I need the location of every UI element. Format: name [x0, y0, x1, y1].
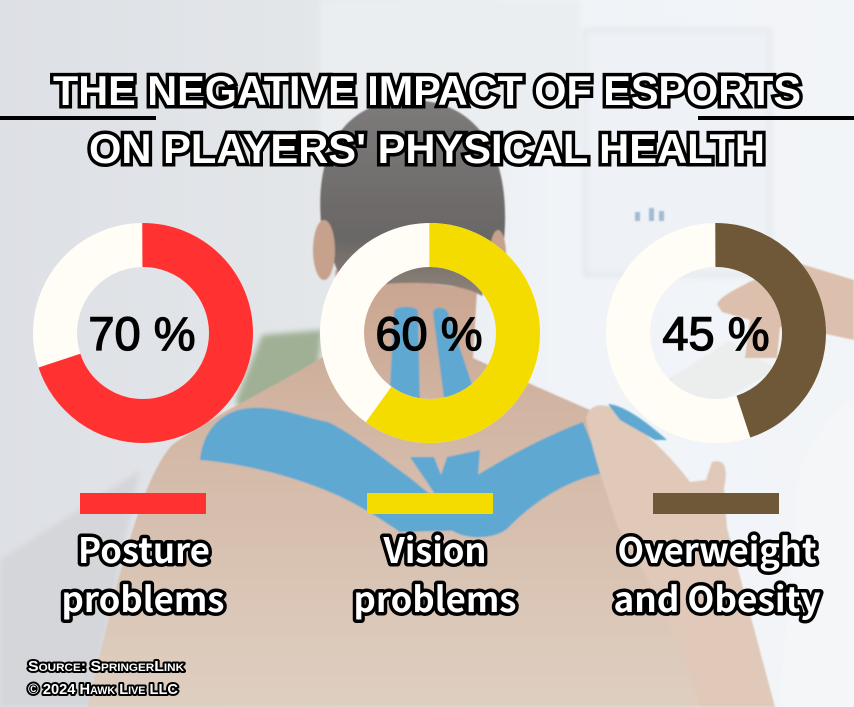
source and copyright	[28, 658, 184, 698]
label: overweight and obesity: Overweight	[618, 523, 817, 574]
source and copyright: © 2024 Hawk Live LLC	[28, 681, 178, 698]
therapist hand on shoulder	[586, 405, 775, 707]
label: posture problems: Posture	[78, 523, 210, 574]
source and copyright: Source: SpringerLink	[28, 658, 184, 675]
donut: posture 70%	[55, 245, 231, 421]
legend bar: overweight	[653, 493, 779, 514]
label: overweight and obesity: and Obesity	[614, 572, 820, 623]
donut: overweight 45%	[628, 245, 804, 421]
title: THE NEGATIVE IMPACT OF ESPORTS	[53, 67, 801, 114]
label: posture problems: problems	[62, 572, 224, 623]
back and shoulders	[87, 270, 772, 707]
donut: vision 60%	[342, 245, 518, 421]
donut: vision 60%: 60 %	[375, 307, 483, 360]
title	[53, 67, 801, 172]
title rules	[0, 116, 854, 120]
legend bar: posture	[80, 493, 206, 514]
tape	[200, 408, 478, 532]
therapist upper hand	[717, 263, 854, 358]
label: posture problems	[62, 523, 224, 623]
keyboard	[667, 341, 777, 410]
label: vision problems: Vision	[383, 523, 486, 574]
donut: posture 70%: 70 %	[88, 307, 196, 360]
label: vision problems	[354, 523, 516, 623]
label: overweight and obesity	[614, 523, 820, 623]
title: ON PLAYERS' PHYSICAL HEALTH	[89, 125, 765, 172]
head	[320, 100, 505, 296]
donut: overweight 45%: 45 %	[662, 307, 770, 360]
label: vision problems: problems	[354, 572, 516, 623]
legend bar: vision	[367, 493, 493, 514]
